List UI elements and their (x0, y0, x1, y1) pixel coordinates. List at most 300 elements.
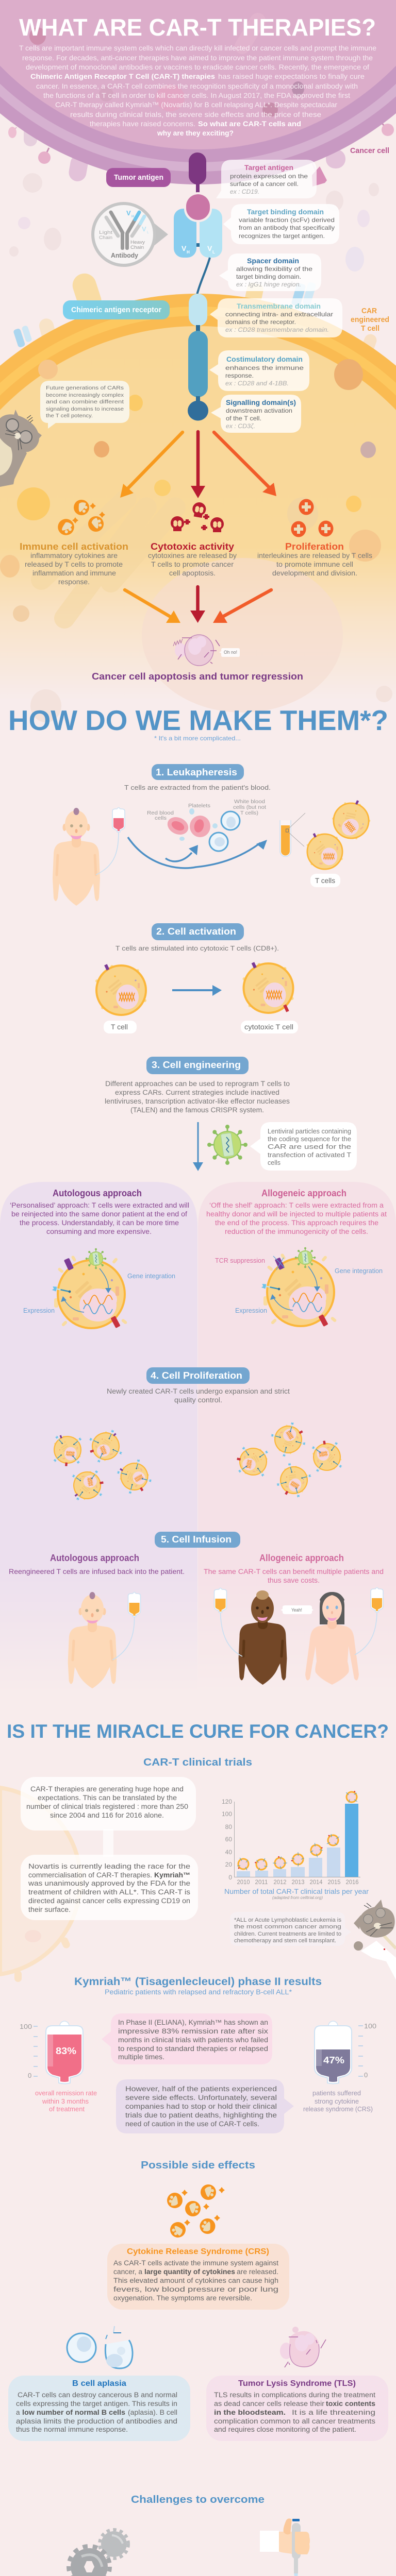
panel: CRS: As CAR-T cells activate the immune system against (113, 2259, 278, 2267)
tumor antigen molecule (189, 152, 206, 196)
callout: transmembrane domain: Transmembrane domain (237, 302, 321, 310)
arrow: to immune activation (120, 432, 183, 498)
autologous text (10, 1188, 189, 1235)
year labels: 2016 (345, 1879, 359, 1886)
female patient (305, 1592, 359, 1685)
panel: CRS: cancer, a (113, 2268, 142, 2276)
panel: tumor lysis syndrome: complication common to all cancer treatments (214, 2417, 375, 2425)
blood cell labels: Platelets (188, 803, 210, 809)
panel: tumor lysis syndrome: toxic contents (326, 2400, 375, 2408)
autologous infusion text (9, 1553, 185, 1575)
trials bubble 2: directed against cancer cells expressing CD19 on (28, 1897, 190, 1905)
curved arrow: separation (128, 837, 267, 868)
panel: CRS: oxygenation. The symptoms are reversible. (113, 2294, 252, 2302)
outcome heading: Cancer cell apoptosis and tumor regression (92, 671, 303, 682)
label: cytotoxic T cell (241, 1021, 298, 1033)
callout: target antigen: protein expressed on the (230, 173, 308, 180)
CAR engineered T cell label: CAR (361, 307, 377, 315)
allogeneic infusion text: The same CAR-T cells can benefit multiple patients and (204, 1568, 384, 1575)
blood cell labels: T cells) (240, 810, 258, 816)
step 3 text: lentiviruses, transcription activator-like effector nucleases (105, 1097, 290, 1105)
callout: target antigen: Target antigen (244, 164, 293, 172)
callout: costimulatory domain: Costimulatory domain (226, 355, 303, 363)
CAR engineered T cell label: engineered (351, 316, 389, 324)
callout: lentiviral particles: cells (268, 1159, 280, 1166)
cancer cell label: Cancer cell (350, 147, 389, 155)
allogeneic transfected cell (215, 1247, 383, 1327)
blood cells (164, 808, 240, 851)
callout: transmembrane domain: ex : CD28 transmembrane domain. (225, 326, 329, 333)
y axis labels (222, 1798, 232, 1881)
y axis labels: 120 (222, 1798, 232, 1805)
activation arrow (172, 985, 222, 996)
antibody inset: V (142, 225, 146, 233)
callout: future generations: Future generations of CARs (46, 385, 124, 391)
result: cytotoxic activity (148, 541, 237, 577)
label: T cells (310, 874, 340, 887)
allogeneic text: ‘Off the shelf’ approach: T cells were extracted from a (209, 1201, 384, 1209)
target binding domain VH VL (174, 192, 222, 258)
label: T cell (104, 1021, 137, 1033)
bag gauge: 83% remission: 100 (20, 2023, 32, 2030)
result: immune cell activation: response. (58, 578, 90, 586)
callout: phase II result: impressive 83% remission rate after six (118, 2027, 268, 2035)
callout: lentiviral particles: transfection of activated T (268, 1151, 351, 1159)
intro paragraph: Chimeric Antigen Receptor T Cell (CAR-T) therapies (30, 72, 215, 80)
panel: CRS: are released. (237, 2268, 278, 2276)
year labels: 2011 (255, 1879, 268, 1886)
target binding domain VH VL: L (212, 250, 215, 255)
blood cell labels: White blood (234, 799, 265, 805)
blood cell labels: cells (155, 815, 167, 821)
spacer line (197, 258, 210, 295)
intro paragraph: results during clinical trials, the severe side effects and the price of these (70, 110, 321, 118)
step 1 text: T cells are extracted from the patient's blood. (124, 784, 271, 791)
y axis labels: 100 (222, 1810, 232, 1818)
bag gauge: 83% remission (20, 2021, 83, 2083)
patient (53, 808, 100, 906)
callout: target binding domain (223, 204, 339, 244)
panel: tumor lysis syndrome: TLS results in complications during the treatment (214, 2391, 375, 2399)
year labels: 2012 (273, 1879, 287, 1886)
callout: future generations: the T cell potency. (46, 413, 93, 419)
callout: lentiviral particles: Lentiviral particles containing (268, 1128, 351, 1135)
arrow: to proliferation (214, 432, 276, 496)
result: immune cell activation (20, 541, 128, 586)
gauge caption: remission (35, 2089, 97, 2113)
callout: phase II result (102, 2013, 272, 2064)
panel: B cell aplasia: cells expressing the target antigen. This results in (16, 2400, 177, 2408)
callout: signalling domain: ex : CD3ζ. (226, 422, 255, 430)
step 5 pill: 5. Cell Infusion (161, 1534, 232, 1545)
intro paragraph (19, 44, 376, 137)
callout: transmembrane domain (210, 298, 342, 337)
step 4 pill: 4. Cell Proliferation (151, 1370, 242, 1381)
icon: B cells (67, 2326, 133, 2368)
intro paragraph: CAR-T therapy called Kymriah™ (Novartis) for B cell relapsing ALL*. Despite spectacular (55, 100, 337, 109)
target binding domain VH VL: H (187, 250, 190, 255)
subheading: * It's a bit more complicated... (154, 735, 241, 742)
bar chart: clinical trials (222, 1789, 360, 1886)
antibody inset: L (147, 231, 149, 234)
callout: ALL definition: chemotherapy and stem cell transplant. (234, 1938, 336, 1944)
callout: signalling domain (211, 395, 301, 433)
blood cell labels: cells (but not (233, 804, 266, 810)
allogeneic transfected cell: TCR suppression (215, 1257, 265, 1264)
callout: ALL definition (230, 1912, 351, 1946)
result: proliferation: interleukines are released by T cells (257, 552, 372, 560)
panel: CRS: Cytokine Release Syndrome (CRS) (127, 2247, 269, 2256)
panel: tumor lysis syndrome: and requires close monitoring of the patient. (214, 2426, 356, 2433)
callout: target binding domain: from an antibody that specifically (239, 224, 335, 231)
autologous text: ‘Personalised’ approach: T cells were extracted and will (10, 1201, 189, 1209)
callout: spacer domain: target binding domain. (236, 273, 301, 280)
autologous CAR-T cells (52, 1428, 154, 1501)
cytotoxic T cell (242, 962, 294, 1013)
panel: CRS: This elevated amount of cytokines can cause high (113, 2277, 278, 2284)
result: cytotoxic activity: cytotoxines are released by (148, 552, 237, 560)
gauge caption: remission: within 3 months (42, 2097, 89, 2105)
intro paragraph: cancer. In essence, a CAR-T cell combines the recognition specificity of a monoclonal antibody with (36, 82, 358, 90)
chart caption: Number of total CAR-T clinical trials per year (224, 1887, 369, 1895)
callout: side effects caution: need of caution in the use of CAR-T cells. (125, 2120, 259, 2128)
heading: is it the miracle cure: IS IT THE MIRACLE CURE FOR CANCER? (7, 1721, 389, 1742)
step 4 text: Newly created CAR-T cells undergo expansion and strict (107, 1387, 290, 1395)
intro paragraph: So what are CAR-T cells and (198, 120, 301, 128)
antibody inset (93, 204, 168, 265)
autologous transfected cell: Expression (23, 1307, 55, 1314)
scientist cat with glasses (0, 410, 42, 487)
arrow: orange-red converging (213, 590, 271, 623)
callout: future generations: signaling domains to increase (46, 406, 124, 412)
autologous text: the process. Understandably, it can be more time (20, 1219, 179, 1227)
callout: future generations (40, 381, 129, 429)
callout: spacer domain: Spacer domain (247, 257, 299, 265)
allogeneic text (206, 1188, 387, 1235)
panel: B cell aplasia: low number of normal B cells (22, 2409, 125, 2416)
trials bubble 2: was unanimously approved by the FDA for the (28, 1879, 190, 1887)
step 4 pill (146, 1367, 250, 1384)
intro paragraph: has raised huge expectations to finally cure (218, 72, 365, 80)
step 2 text: T cells are stimulated into cytotoxic T cells (CD8+). (116, 944, 279, 952)
callout: side effects caution: trials due to patient deaths, highlighting the (125, 2111, 277, 2119)
dying cancer cell (173, 635, 220, 666)
callout: target antigen (216, 160, 317, 198)
autologous infusion text: Autologous approach (50, 1553, 139, 1563)
callout: future generations: and can combine different (46, 399, 124, 405)
panel: CRS: fevers, low blood pressure or poor lung (113, 2285, 278, 2293)
allogeneic text: healthy donor and will be injected to multiple patients at (206, 1210, 387, 1218)
panel: tumor lysis syndrome: Tumor Lysis Syndrome (TLS) (238, 2379, 356, 2388)
autologous infusion text: Reengineered T cells are infused back into the patient. (9, 1568, 185, 1575)
autologous transfected cell (23, 1248, 175, 1328)
trials bubble 1: since 2004 and 116 for 2016 alone. (50, 1811, 164, 1819)
autologous patient (68, 1592, 117, 1688)
allogeneic text: Allogeneic approach (261, 1188, 346, 1198)
arrow: orange converging (125, 590, 180, 623)
chimeric antigen receptor pill: Chimeric antigen receptor (71, 306, 161, 314)
callout: target binding domain: variable fraction (scFv) derived (239, 216, 335, 224)
chimeric antigen receptor pill (63, 300, 170, 319)
icon: pipette (260, 2518, 310, 2576)
down arrow (193, 1122, 203, 1171)
step 3 text: (TALEN) and the famous CRISPR system. (130, 1106, 264, 1114)
bag gauge: 47% CRS: 100 (364, 2022, 376, 2030)
allogeneic infusion text: Allogeneic approach (259, 1553, 344, 1563)
year labels: 2013 (292, 1879, 304, 1886)
trials bubble 1: CAR-T therapies are generating huge hope and (30, 1785, 184, 1793)
bag gauge: 47% CRS: 0 (364, 2071, 368, 2079)
panel: B cell aplasia: B cell aplasia (72, 2379, 126, 2388)
y axis labels: 40 (225, 1849, 232, 1856)
trials bubble 2: treatment of children with ALL*. This CAR-T is (28, 1888, 190, 1896)
antibody inset: H (131, 215, 134, 218)
bar cell icons (237, 1789, 359, 1872)
heading: clinical trials: CAR-T clinical trials (143, 1757, 252, 1768)
step 3 pill: 3. Cell engineering (152, 1059, 241, 1070)
gauge caption: CRS: patients suffered (312, 2089, 361, 2097)
result: proliferation: to promote immune cell (276, 561, 353, 568)
antibody inset: Light (99, 230, 112, 235)
callout: phase II result: to respond to standard therapies or relapsed (118, 2045, 268, 2053)
blood cell labels (147, 799, 266, 821)
CAR-T bag for female patient (355, 1588, 383, 1655)
result: immune cell activation: Immune cell activation (20, 541, 128, 552)
panel: tumor lysis syndrome: It is a life threatening (292, 2409, 375, 2416)
result: proliferation (257, 541, 372, 577)
callout: lentiviral particles: the coding sequence for the (268, 1136, 351, 1143)
trials bubble 2 (21, 1855, 198, 1920)
callout: oh no (219, 648, 240, 657)
y axis labels: 80 (225, 1823, 232, 1831)
bag gauge: 47% CRS: 47% (323, 2055, 344, 2065)
callout: lentiviral particles: CAR are used for the (268, 1143, 351, 1150)
bag gauge: 83% remission: 0 (28, 2072, 31, 2079)
gauge caption: CRS: strong cytokine (315, 2097, 359, 2105)
callout: phase II result: months in clinical trials with patients who failed (118, 2036, 268, 2044)
year labels (237, 1879, 359, 1886)
callout: signalling domain: of the T cell. (226, 415, 261, 422)
gauge caption: remission: of treatment (49, 2105, 85, 2113)
allogeneic transfected cell: Gene integration (335, 1267, 383, 1275)
surface proteins around the T cell (13, 270, 378, 361)
step 3 text: Different approaches can be used to reprogram T cells to (105, 1080, 290, 1088)
callout: yeah: Yeah! (291, 1607, 302, 1613)
tumor antigen pill (106, 168, 171, 187)
callout: spacer domain: ex : IgG1 hinge region. (236, 281, 301, 288)
intro paragraph: the functions of a T cell in order to kill cancer cells. In August 2017, the FDA approved the first (43, 91, 350, 99)
isolated T cells (306, 795, 377, 869)
icons: cytokines (55, 498, 106, 538)
label: T cell: T cell (111, 1023, 128, 1031)
callout: target binding domain: recognizes the target antigen. (239, 232, 325, 240)
callout: spacer domain: allowing flexibility of the (236, 265, 312, 273)
callout: spacer domain (219, 253, 321, 291)
label: cytotoxic T cell: cytotoxic T cell (244, 1023, 293, 1031)
callout: costimulatory domain: enhances the immune (225, 364, 304, 371)
arrow: red converging (190, 587, 205, 623)
callout: side effects caution: severe side effects. Unfortunately, several (125, 2094, 277, 2102)
approach panel: autologous (0, 1182, 197, 1700)
faded T cell background (0, 1788, 80, 1982)
step 1 pill (152, 764, 244, 780)
result: cytotoxic activity: Cytotoxic activity (151, 541, 234, 552)
callout: oh no: Oh no! (224, 650, 237, 655)
allogeneic transfected cell: Expression (235, 1307, 267, 1314)
icon: lentivirus (207, 1125, 248, 1165)
CAR intracellular domains (188, 294, 208, 420)
label: T cells: T cells (315, 876, 335, 885)
allogeneic text: reduction of the immunogenicity of the cells. (225, 1228, 368, 1235)
autologous text: Autologous approach (53, 1188, 142, 1198)
panel: B cell aplasia: (aplasia). B cell (128, 2409, 177, 2416)
trials bubble 2: commercialisation of CAR-T therapies. (28, 1871, 152, 1879)
panel: CRS (107, 2244, 289, 2310)
result: immune cell activation: inflammation and immune (32, 569, 116, 577)
result: immune cell activation: inflammatory cytokines are (30, 552, 118, 560)
allogeneic CAR-T cells (235, 1419, 343, 1501)
result: proliferation: development and division. (272, 569, 357, 577)
step 1 pill: 1. Leukapheresis (156, 767, 237, 777)
CAR engineered T cell label (351, 307, 389, 333)
result: cytotoxic activity: T cells to promote cancer (151, 561, 234, 568)
tumor antigen pill: Tumor antigen (114, 174, 163, 182)
title: WHAT ARE CAR-T THERAPIES? (19, 14, 376, 41)
chart source: (adapted from celltrial.org) (272, 1895, 323, 1900)
callout: future generations: become increasingly complex (46, 392, 124, 398)
callout: ALL definition: the most common cancer among (234, 1924, 341, 1930)
allogeneic infusion text: thus save costs. (268, 1577, 320, 1584)
trials bubble 2: Kymriah™ (154, 1871, 190, 1879)
approach panel: allogeneic (198, 1182, 396, 1700)
callout: side effects caution: companies had to stop or hold their clinical (125, 2103, 277, 2110)
y axis labels: 60 (225, 1836, 232, 1843)
result: proliferation: Proliferation (285, 541, 344, 552)
icon: gears (69, 2530, 128, 2576)
surface proteins around the top cancer cell (8, 121, 394, 272)
intro paragraph: response. For decades, anti-cancer therapies have aimed to improve the patient immune system through the (22, 54, 373, 62)
callout: target binding domain: Target binding domain (247, 208, 324, 216)
heading: Kymriah results: Kymriah™ (Tisagenlecleucel) phase II results (74, 1976, 322, 1988)
antibody inset: V (126, 209, 131, 217)
gauge caption: CRS (303, 2089, 373, 2113)
panel: tumor lysis syndrome: in the bloodsteam. (214, 2409, 286, 2416)
antibody inset: Chain (130, 245, 144, 250)
intro paragraph: development of monoclonal antibodies or vaccines to eradicate cancer cells. Recently, the emergence of (26, 63, 369, 71)
bars (237, 1804, 358, 1877)
trials bubble 2: their surface. (28, 1906, 71, 1913)
heading: challenges: Challenges to overcome (131, 2494, 265, 2505)
result: immune cell activation: released by T cells to promote (25, 561, 123, 568)
gauge caption: CRS: release syndrome (CRS) (303, 2105, 373, 2113)
intro paragraph: therapies have raised concerns. (90, 120, 195, 128)
scientist cat in lab coat (354, 1900, 396, 1980)
step 5 pill (155, 1532, 240, 1548)
top cancer cell (0, 0, 396, 184)
step 3 pill (146, 1057, 249, 1074)
intro paragraph: why are they exciting? (157, 129, 234, 137)
callout: phase II result: multiple times. (118, 2053, 164, 2061)
blood bag and tube (96, 808, 125, 875)
callout: target antigen: surface of a cancer cell. (230, 180, 299, 188)
callout: yeah (280, 1605, 314, 1614)
panel: tumor lysis syndrome (206, 2376, 388, 2441)
antibody inset: Chain (99, 235, 112, 241)
dark-skinned patient (239, 1590, 287, 1685)
trials bubble 1: number of clinical trials registered : more than 250 (26, 1803, 188, 1810)
bag gauge: 47% CRS (315, 2021, 376, 2083)
callout: phase II result: In Phase II (ELIANA), Kymriah™ has shown an (118, 2019, 268, 2026)
panel: tumor lysis syndrome: as dead cancer cells release their (214, 2400, 325, 2408)
icon: cytokine cluster (166, 2184, 225, 2241)
callout: side effects caution: However, half of the patients experienced (125, 2085, 277, 2093)
arrow: to cytotoxic activity (191, 432, 205, 498)
result: cytotoxic activity: cell apoptosis. (169, 569, 216, 577)
callout: ALL definition: children. Current treatments are limited to (234, 1931, 341, 1937)
callout: transmembrane domain: domains of the receptor. (225, 318, 296, 326)
CAR-T bag autologous (112, 1592, 140, 1660)
icon: lysed tumor cell (280, 2327, 326, 2367)
icons: skulls (171, 501, 224, 532)
year labels: 2015 (328, 1879, 340, 1886)
panel: CRS: large quantity of cytokines (144, 2268, 235, 2276)
autologous text: be reinjected into the same donor patient at the end of (11, 1210, 187, 1218)
year labels: 2014 (309, 1879, 323, 1886)
target binding domain VH VL: V (207, 244, 212, 252)
callout: lentiviral particles (250, 1122, 357, 1171)
y axis labels: 0 (228, 1874, 232, 1881)
panel: B cell aplasia: thus the normal immune response. (16, 2426, 128, 2433)
heading: side effects: Possible side effects (141, 2160, 255, 2171)
panel: B cell aplasia (8, 2376, 190, 2441)
panel: B cell aplasia: a (16, 2409, 20, 2416)
CAR engineered T cell (0, 294, 396, 722)
heading: how do we make them: HOW DO WE MAKE THEM*? (8, 704, 388, 736)
autologous transfected cell: Gene integration (127, 1272, 175, 1280)
step 4 text: quality control. (174, 1396, 222, 1404)
callout: signalling domain: downstream activation (226, 407, 292, 414)
autologous text: consuming and more expensive. (46, 1228, 152, 1235)
callout: transmembrane domain: connecting intra- and extracellular (225, 311, 333, 318)
step 4 text (107, 1387, 290, 1404)
step 3 text (105, 1080, 290, 1114)
antibody inset: Antibody (111, 252, 138, 259)
antibody inset: Heavy (130, 240, 145, 245)
target binding domain VH VL: V (182, 244, 187, 252)
gauge caption: remission: overall remission rate (35, 2089, 97, 2097)
intro paragraph: T cells are important immune system cells which can directly kill infected or cancer cells and prompt the immune (19, 44, 376, 52)
allogeneic text: the end of the process. This approach requires the (215, 1219, 378, 1227)
y axis labels: 20 (225, 1861, 232, 1868)
callout: target antigen: ex : CD19. (230, 188, 259, 195)
icons: proliferation (291, 499, 333, 537)
year labels: 2010 (237, 1879, 250, 1886)
step 2 pill: 2. Cell activation (156, 926, 236, 937)
trials bubble 2: Novartis is currently leading the race for the (28, 1862, 190, 1870)
callout: signalling domain: Signalling domain(s) (226, 399, 296, 406)
callout: costimulatory domain: response. (225, 372, 254, 379)
callout: costimulatory domain (209, 350, 309, 391)
trials bubble 1 (21, 1777, 196, 1857)
callout: ALL definition: *ALL or Acute Lymphoblastic Leukemia is (234, 1917, 342, 1923)
step 3 text: express CARs. Current strategies include inactived (115, 1089, 279, 1096)
step 2 pill (152, 923, 244, 940)
panel: B cell aplasia: aplasia limits the production of antibodies and (16, 2417, 177, 2425)
CAR engineered T cell label: T cell (361, 325, 380, 333)
bag gauge: 83% remission: 83% (56, 2046, 76, 2056)
callout: costimulatory domain: ex : CD28 and 4-1BB. (225, 380, 289, 387)
allogeneic infusion text (204, 1553, 384, 1584)
